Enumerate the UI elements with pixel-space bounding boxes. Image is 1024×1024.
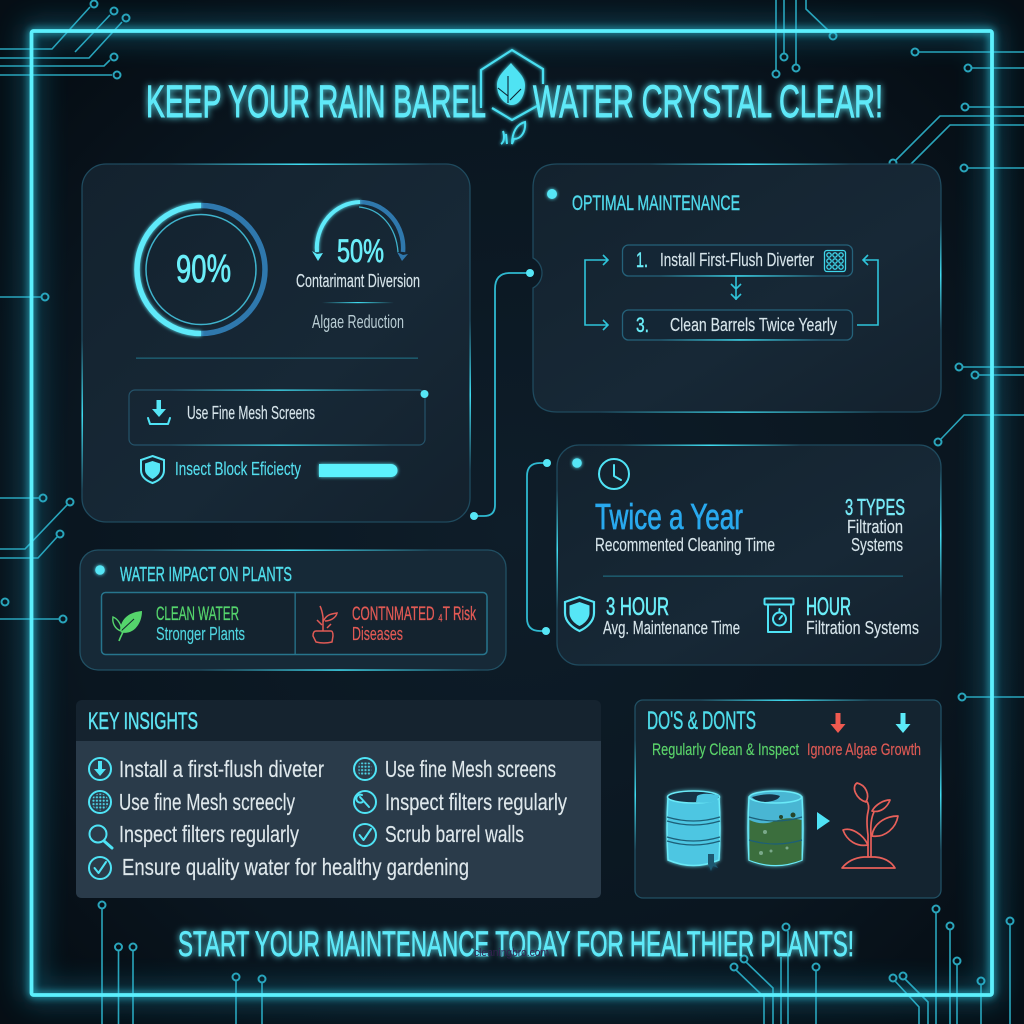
step 1: Install First-Flush Diverter [660,250,814,270]
panel: cleaning time stats [556,444,942,665]
panel: water impact on plants [80,550,506,671]
step 1 [622,245,852,277]
heading: WATER IMPACT ON PLANTS [120,564,292,586]
comparison table [102,592,487,655]
heading: KEY INSIGHTS [88,708,198,735]
heading: OPTIMAL MAINTENANCE [572,192,740,215]
icon: hexagon leaf emblem [481,50,543,144]
contaminated text: CONTNMATED ₄T Risk [352,604,476,625]
label: algae reduction: Algae Reduction [312,312,404,332]
right list [385,756,567,847]
comparison table: Diseases [352,624,403,644]
comparison table: Stronger Plants [156,624,245,644]
stat: 3 types: Filtration [847,517,903,537]
stat: 3 types: 3 TYPES [845,494,905,520]
icon: cyan arrow [896,713,910,733]
insect block efficiency meter: Insect Block Eficiecty [175,459,301,479]
stat: 3 hour [565,593,740,638]
label: contaminant diversion: Contarimant Diversion [296,271,420,291]
icon: clean barrel [667,791,720,871]
clean water text: CLEAN WATER [156,604,239,625]
gauge: 50 percent arc: 50% [337,233,384,269]
step 3: 3. [636,314,649,337]
step 3: Clean Barrels Twice Yearly [670,315,837,335]
right list: Inspect filters regularly [385,789,567,815]
panel: do's and don'ts [634,700,942,898]
left list: Use fine Mesh screecly [119,789,295,815]
callout: fine mesh screens: Use Fine Mesh Screens [187,403,315,423]
status dot [572,458,582,468]
do label: Regularly Clean & Inspect [652,740,799,759]
step 3 [622,310,852,341]
gauge: 90 percent ring [137,206,265,334]
list icons [89,758,376,879]
panel: efficiency stats [82,164,471,522]
panel: key insights [76,700,601,898]
icon: algae barrel [748,791,803,866]
callout: fine mesh screens [129,390,428,446]
gauge: 50 percent arc [312,202,408,269]
closing list item: Ensure quality water for healthy gardening [122,854,469,880]
stat: hour: HOUR [806,593,851,621]
icon: red plant [842,783,898,868]
gauge: 90 percent ring: 90% [176,248,231,291]
icon: sick plant [313,606,337,643]
status dot [95,565,105,575]
watermark: cleaningbro.com [474,947,549,959]
title: KEEP YOUR RAIN BAREL [146,76,486,127]
status dot [547,189,557,199]
icon: mesh filter [824,250,846,272]
flow arrows [585,255,878,330]
icon: clock [599,459,629,489]
icon: green leaf [113,611,142,641]
stat: 3 types [845,494,905,555]
icon: play arrow [817,812,830,830]
right list: Scrub barrel walls [385,821,524,847]
right list: Use fine Mesh screens [385,756,556,782]
recommended cleaning time: Recommented Cleaning Time [595,535,775,555]
insect block efficiency meter [141,456,398,483]
stat: 3 hour: Avg. Maintenance Time [603,618,740,638]
left list: Inspect filters regularly [119,821,299,847]
connector: stats to maintenance [470,269,534,520]
stat: hour [764,593,919,638]
stat: hour: Filtration Systems [806,618,919,638]
left list: Install a first-flush diveter [119,756,324,782]
icon: red arrow [830,713,846,733]
stat: 3 types: Systems [851,535,903,555]
left list [119,756,324,847]
stat: 3 hour: 3 HOUR [606,593,669,621]
step 1: 1. [636,249,648,272]
connector: side bracket [527,459,551,635]
headline: twice a year: Twice a Year [595,496,743,537]
dont label: Ignore Algae Growth [807,740,921,759]
heading: DO'S & DONTS [647,707,756,735]
icon: download [148,400,170,424]
panel: optimal maintenance [533,164,942,413]
